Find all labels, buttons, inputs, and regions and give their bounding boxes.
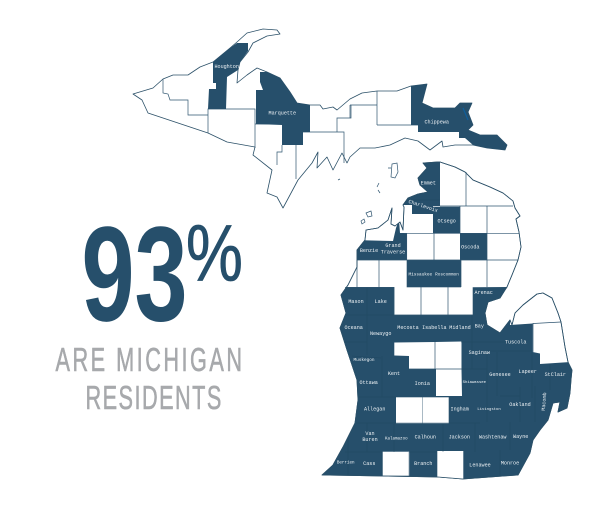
county fill: Marquette xyxy=(256,72,310,145)
label: Houghton: Houghton xyxy=(214,64,239,70)
label: Grand Traverse: Traverse xyxy=(381,250,405,256)
upper peninsula outline xyxy=(133,29,507,208)
counties: Missaukee and Roscommon xyxy=(407,260,461,287)
label: Lapeer: Lapeer xyxy=(519,369,537,375)
label: Mason: Mason xyxy=(348,299,364,305)
label: Jackson: Jackson xyxy=(449,434,470,440)
county labels xyxy=(214,64,566,469)
river on Chippewa county xyxy=(463,108,468,120)
label: Washtenaw: Washtenaw xyxy=(479,434,506,440)
label: Oscoda: Oscoda xyxy=(461,244,479,250)
label: Newaygo: Newaygo xyxy=(370,331,391,337)
white county: Barry xyxy=(396,397,422,423)
label: Wayne: Wayne xyxy=(513,434,528,440)
lower peninsula xyxy=(322,162,572,480)
label: Ingham: Ingham xyxy=(451,406,469,412)
label: Saginaw: Saginaw xyxy=(469,350,490,356)
label: Charlevoix: Charlevoix xyxy=(408,199,438,214)
label: Kent: Kent xyxy=(388,371,400,377)
north counties: Emmet and Charlevoix xyxy=(404,162,440,214)
label: Oceana: Oceana xyxy=(345,325,363,331)
label: Branch: Branch xyxy=(414,461,432,467)
lower peninsula base xyxy=(322,162,572,479)
label: Oakland: Oakland xyxy=(509,402,531,408)
dark counties xyxy=(323,162,572,479)
county: Oscoda xyxy=(460,233,487,260)
statistic: 93% xyxy=(82,198,243,349)
label: Genesee: Genesee xyxy=(489,372,511,378)
label: StClair: StClair xyxy=(545,372,566,378)
label: Mecosta: Mecosta xyxy=(397,325,419,331)
southern block of counties xyxy=(323,287,572,478)
label: Isabella: Isabella xyxy=(422,325,447,331)
label: Livingston: Livingston xyxy=(477,407,501,412)
label: Emmet: Emmet xyxy=(421,180,436,186)
label: Van Buren: Van xyxy=(365,431,375,437)
infographic xyxy=(55,28,572,480)
county: Otsego xyxy=(433,207,460,233)
label: Midland: Midland xyxy=(449,325,471,331)
label: Benzie: Benzie xyxy=(360,248,378,254)
county fill: Houghton xyxy=(208,43,248,109)
label: Van Buren: Buren xyxy=(362,437,378,443)
label: Kalamazoo: Kalamazoo xyxy=(385,436,408,442)
label: Roscommon: Roscommon xyxy=(435,272,459,278)
county boundaries within dark area xyxy=(355,342,533,476)
islands xyxy=(338,163,518,224)
counties: Benzie and Grand Traverse xyxy=(357,223,406,260)
lower peninsula coastline xyxy=(322,162,572,479)
map of Michigan by county xyxy=(133,29,600,490)
label: Lake: Lake xyxy=(375,299,387,305)
caption: are Michigan residents xyxy=(56,341,242,416)
label: Marquette: Marquette xyxy=(269,110,296,116)
label: Ottawa: Ottawa xyxy=(360,380,378,386)
label: Berrien: Berrien xyxy=(337,460,355,466)
upper peninsula county lines xyxy=(163,79,418,179)
white county: Hillsdale xyxy=(437,451,463,480)
label: Grand Traverse: Grand xyxy=(385,243,401,249)
label: Chippewa: Chippewa xyxy=(424,120,449,126)
white county: Eaton xyxy=(423,397,449,423)
label: Muskegon: Muskegon xyxy=(353,358,375,363)
white county: St. Joseph xyxy=(383,452,409,476)
label: Missaukee: Missaukee xyxy=(408,272,433,278)
label: Tuscola: Tuscola xyxy=(505,340,526,346)
label: Calhoun: Calhoun xyxy=(415,434,436,440)
number 93: 93 xyxy=(82,198,188,349)
percent sign: % xyxy=(186,209,243,298)
caption line 2: RESIDENTS xyxy=(86,379,221,416)
label: Arenac: Arenac xyxy=(475,290,493,296)
label: Cass: Cass xyxy=(363,461,375,467)
label: Ionia: Ionia xyxy=(415,381,430,387)
label: Lenawee: Lenawee xyxy=(469,462,491,468)
county fill: Chippewa xyxy=(411,84,507,150)
label: Monroe: Monroe xyxy=(501,460,519,466)
label: Shiawassee: Shiawassee xyxy=(463,380,487,385)
label: Otsego: Otsego xyxy=(438,218,456,224)
label: Macomb: Macomb xyxy=(541,392,548,411)
upper peninsula xyxy=(133,29,507,208)
caption line 1: ARE MICHIGAN xyxy=(56,341,242,378)
label: Bay: Bay xyxy=(475,324,484,330)
label: Allegan: Allegan xyxy=(364,406,385,412)
lower peninsula county grid xyxy=(345,172,561,369)
white counties: Montcalm and Gratiot xyxy=(394,342,462,396)
